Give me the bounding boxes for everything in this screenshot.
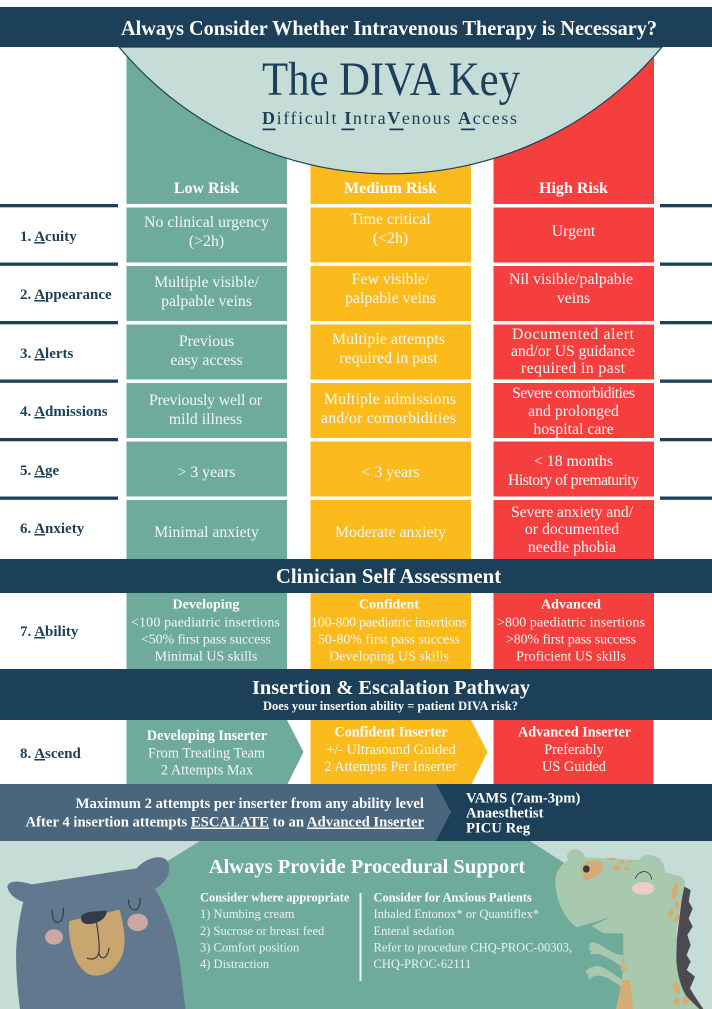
row 1: acuity: 1. Acuity — [20, 229, 77, 245]
heading: The DIVA Key semicircle — [119, 47, 662, 174]
panel: medium risk column header — [310, 47, 471, 204]
row 6: anxiety — [20, 500, 654, 559]
row 5: age: < 18 months — [534, 453, 613, 470]
row 4: admissions: mild illness — [169, 411, 242, 428]
row 1: acuity: (>2h) — [189, 233, 224, 250]
row 7: ability: Advanced — [541, 598, 601, 612]
text block: consider for anxious patients: Enteral sedation — [374, 924, 455, 938]
text block: consider where appropriate: 4) Distraction — [200, 957, 270, 971]
row 8: ascend pathway: 2 Attempts Per Inserter — [324, 759, 457, 775]
text block: consider for anxious patients: CHQ-PROC-62111 — [374, 957, 471, 971]
text block: consider for anxious patients: Consider for Anxious Patients — [374, 890, 532, 904]
row 7: ability: <100 paediatric insertions — [131, 616, 280, 630]
icon: bear — [7, 857, 185, 1009]
row 2: appearance — [20, 266, 654, 321]
banner: escalation: After 4 insertion attempts ESCALATE to an Advanced Inserter — [26, 814, 424, 830]
text block: consider where appropriate — [200, 890, 350, 971]
banner: escalation: VAMS (7am-3pm) — [466, 790, 580, 806]
row 5: age: < 3 years — [361, 464, 420, 481]
row 4: admissions: Previously well or — [149, 392, 263, 409]
row 1: acuity: Time critical — [350, 211, 431, 228]
row dividers — [0, 204, 712, 500]
text block: consider for anxious patients: Inhaled Entonox* or Quantiflex* — [374, 907, 539, 921]
banner: escalation: Anaesthetist — [466, 806, 544, 822]
row 3: alerts: Multiple attempts — [332, 331, 445, 348]
row 4: admissions — [20, 383, 654, 438]
row 1: acuity: Urgent — [552, 223, 596, 240]
text block: consider where appropriate: 2) Sucrose or breast feed — [200, 924, 325, 938]
text block: consider where appropriate: 3) Comfort position — [200, 940, 300, 954]
row 3: alerts: required in past — [521, 360, 626, 377]
row 7: ability: 50-80% first pass success — [318, 632, 460, 648]
row 3: alerts: Previous — [179, 333, 234, 350]
panel: medium risk column header: Medium Risk — [344, 180, 437, 197]
row 5: age: > 3 years — [177, 464, 236, 481]
row 6: anxiety: or documented — [525, 521, 619, 538]
row 4: admissions: 4. Admissions — [20, 404, 108, 420]
heading: The DIVA Key semicircle: The DIVA Key — [262, 53, 520, 106]
row 3: alerts: required in past — [339, 350, 438, 367]
row 8: ascend pathway — [20, 720, 654, 785]
row 7: ability: <50% first pass success — [141, 632, 271, 648]
row 3: alerts: easy access — [170, 352, 243, 369]
row 7: ability — [20, 593, 654, 669]
row 8: ascend pathway: Developing Inserter — [147, 728, 267, 744]
row 2: appearance: palpable veins — [161, 293, 252, 310]
text block: consider for anxious patients — [374, 890, 572, 971]
banner: clinician self assessment — [0, 559, 712, 593]
text block: consider for anxious patients: Refer to procedure CHQ-PROC-00303, — [374, 940, 572, 954]
heading: always provide procedural support: Always Provide Procedural Support — [209, 856, 525, 878]
row 3: alerts — [20, 324, 654, 380]
row 6: anxiety: Moderate anxiety — [335, 524, 446, 541]
row 5: age — [20, 442, 654, 496]
row 3: alerts: Documented alert — [512, 326, 635, 343]
row 6: anxiety: Minimal anxiety — [154, 524, 259, 541]
row 4: admissions: and prolonged — [528, 403, 619, 420]
row 2: appearance: veins — [557, 290, 590, 307]
row 7: ability: Minimal US skills — [155, 650, 257, 664]
icon: dinosaur — [555, 849, 703, 1009]
banner: escalation: Maximum 2 attempts per inserter from any ability level — [76, 796, 424, 812]
row 8: ascend pathway: 2 Attempts Max — [161, 762, 253, 778]
row 8: ascend pathway: Advanced Inserter — [518, 724, 631, 740]
row 7: ability: 100-800 paediatric insertions — [311, 616, 467, 630]
row 1: acuity: No clinical urgency — [144, 214, 269, 231]
row 3: alerts: 3. Alerts — [20, 346, 74, 362]
row 8: ascend pathway: 8. Ascend — [20, 746, 82, 762]
row 4: admissions: and/or comorbidities — [321, 410, 456, 427]
banner: insertion and escalation pathway: Does your insertion ability = patient DIVA risk? — [263, 699, 518, 713]
panel: low risk column header: Low Risk — [174, 180, 239, 197]
banner: insertion and escalation pathway — [0, 669, 712, 720]
banner: insertion and escalation pathway: Insertion & Escalation Pathway — [252, 677, 530, 699]
row 7: ability: Developing US skills — [329, 650, 449, 664]
row 2: appearance: palpable veins — [345, 290, 436, 307]
row 6: anxiety: Severe anxiety and/ — [511, 504, 634, 521]
panel: low risk column header — [126, 47, 287, 204]
row 6: anxiety: 6. Anxiety — [20, 521, 85, 537]
panel: procedural support background — [0, 841, 712, 1009]
row 2: appearance: Nil visible/palpable — [509, 271, 633, 288]
panel: high risk column header: High Risk — [539, 180, 608, 197]
row 5: age: History of prematurity — [508, 472, 639, 489]
row 4: admissions: hospital care — [533, 421, 614, 438]
banner: escalation: PICU Reg — [466, 820, 531, 836]
row 7: ability: Confident — [359, 598, 419, 612]
banner: escalation — [0, 784, 712, 841]
row 1: acuity: (<2h) — [373, 230, 408, 247]
title banner: Always Consider Whether Intravenous Therapy is Necessary? — [121, 16, 657, 40]
text block: consider where appropriate: 1) Numbing cream — [200, 907, 295, 921]
row 8: ascend pathway: Confident Inserter — [334, 724, 448, 740]
row 5: age: 5. Age — [20, 463, 60, 479]
row 3: alerts: and/or US guidance — [511, 343, 635, 360]
row 2: appearance: 2. Appearance — [20, 287, 112, 303]
text block: consider where appropriate: Consider where appropriate — [200, 890, 350, 904]
row 6: anxiety: needle phobia — [528, 539, 616, 556]
row 7: ability: 7. Ability — [20, 624, 79, 640]
row 4: admissions: Severe comorbidities — [512, 385, 635, 402]
row 2: appearance: Multiple visible/ — [154, 274, 260, 291]
row 8: ascend pathway: From Treating Team — [148, 746, 265, 762]
row 1: acuity — [20, 208, 654, 262]
row 8: ascend pathway: +/- Ultrasound Guided — [326, 742, 456, 758]
row 7: ability: >800 paediatric insertions — [497, 616, 645, 630]
row 7: ability: Developing — [173, 598, 239, 612]
panel: high risk column header — [494, 47, 654, 204]
row 8: ascend pathway: Preferably — [544, 742, 605, 758]
heading: The DIVA Key semicircle: Difficult IntraVenous Access — [262, 108, 517, 128]
row 7: ability: >80% first pass success — [506, 632, 636, 648]
row 4: admissions: Multiple admissions — [324, 391, 456, 408]
title banner — [0, 7, 712, 47]
row 8: ascend pathway: US Guided — [542, 759, 606, 775]
row 7: ability: Proficient US skills — [516, 650, 626, 664]
row 2: appearance: Few visible/ — [352, 271, 430, 288]
banner: clinician self assessment: Clinician Self Assessment — [276, 565, 501, 588]
